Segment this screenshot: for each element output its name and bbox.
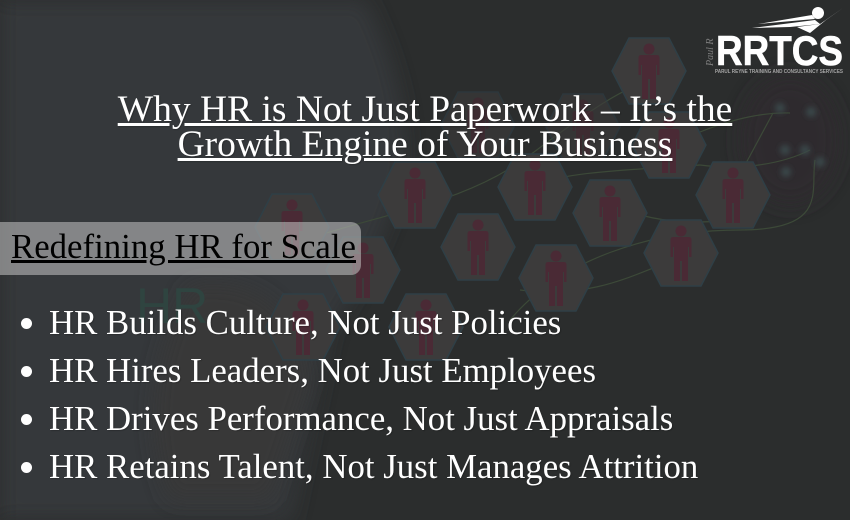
icon: swoosh figure (752, 7, 843, 33)
background photo: hexagon people network: HR (136, 278, 208, 334)
title: Growth Engine of Your Business (178, 124, 672, 164)
bullet 1 (20, 318, 32, 329)
logo: RRTCS (705, 7, 844, 75)
section heading: Redefining HR for Scale (11, 227, 356, 266)
bullet text 3: HR Drives Performance, Not Just Appraisals (49, 399, 673, 438)
title: Why HR is Not Just Paperwork – It’s the (118, 89, 732, 130)
logo signature: Paul R (705, 38, 716, 67)
bullet text 2: HR Hires Leaders, Not Just Employees (49, 351, 596, 390)
section badge background (0, 222, 361, 275)
bullet text 1: HR Builds Culture, Not Just Policies (49, 303, 561, 342)
bullet 2 (20, 366, 32, 377)
bullet text 4: HR Retains Talent, Not Just Manages Attrition (49, 447, 698, 486)
logo tagline: PARUL REYNE TRAINING AND CONSULTANCY SERVICES (715, 69, 844, 75)
bullet 4 (20, 462, 32, 473)
bullet 3 (20, 414, 32, 425)
title (118, 89, 732, 165)
bullet list (21, 303, 698, 486)
